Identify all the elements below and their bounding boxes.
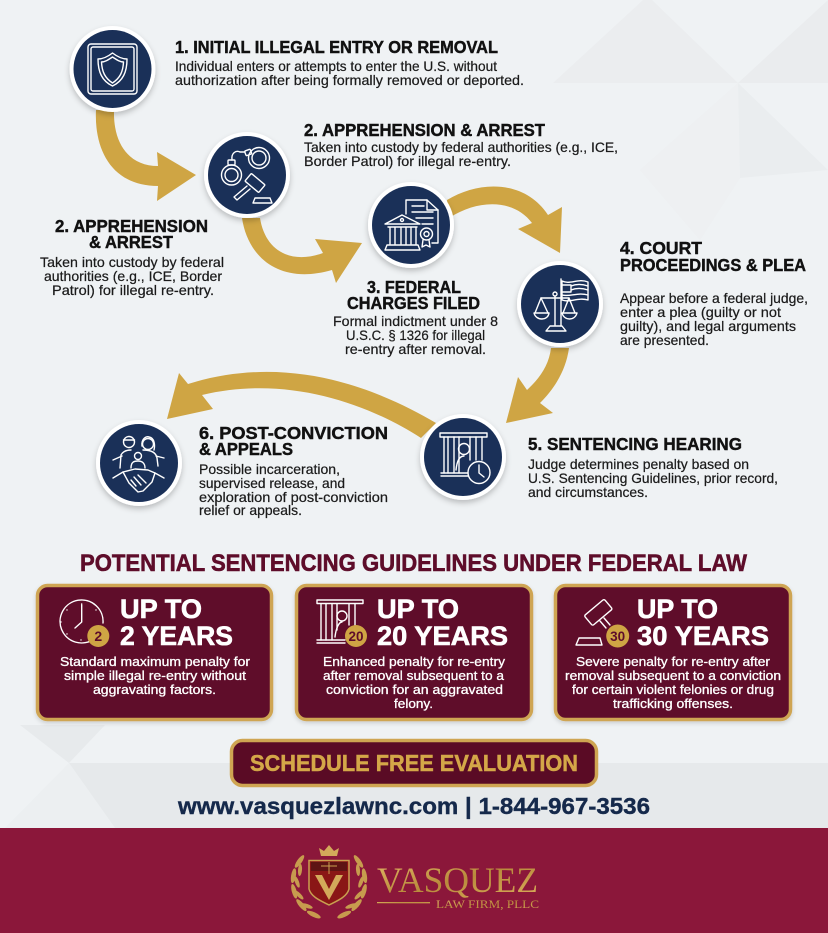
panel: up to 30 years: UP TO <box>637 594 718 624</box>
panel: up to 20 years: 20 YEARS <box>377 621 508 651</box>
panel: up to 2 years: aggravating factors. <box>93 682 216 697</box>
step 5 text: Judge determines penalty based on <box>528 456 749 472</box>
icon: courthouse and document <box>368 182 454 268</box>
logo: laurel, shield and crown <box>290 845 368 920</box>
icon: prison bars with 20 badge <box>317 600 367 647</box>
step 3 text: 3. FEDERAL <box>367 277 461 297</box>
panel: up to 30 years: 30 YEARS <box>637 621 769 651</box>
icon: gavel with 30 badge: 30 <box>610 629 625 644</box>
step 6 text: & APPEALS <box>199 439 293 459</box>
icon: clock with 2 badge: 2 <box>94 628 102 644</box>
contact line: www.vasquezlawnc.com | 1-844-967-3536 <box>177 793 650 819</box>
panel: up to 30 years: Severe penalty for re-entry after <box>576 654 771 669</box>
step 6 text: relief or appeals. <box>199 502 302 518</box>
button: schedule free evaluation: SCHEDULE FREE EVALUATION <box>250 750 578 776</box>
button: schedule free evaluation <box>232 740 596 786</box>
panel: up to 2 years: UP TO <box>120 594 202 624</box>
step 3 text: re-entry after removal. <box>345 341 486 357</box>
step 3 text <box>333 277 498 357</box>
icon: shield in border frame <box>70 26 156 112</box>
step 1 text: authorization after being formally removed or deported. <box>175 72 524 88</box>
step 2 text right: Border Patrol) for illegal re-entry. <box>304 153 511 169</box>
step 2 text left: & ARREST <box>89 232 173 252</box>
step 2 text right: Taken into custody by federal authorities (e.g., ICE, <box>304 139 618 155</box>
logo wordmark: VASQUEZ <box>377 860 538 900</box>
arrow: step 1 to step 2 <box>96 110 196 201</box>
step 1 text <box>175 37 524 88</box>
step 6 text: exploration of post-conviction <box>199 489 388 505</box>
step 5 text: 5. SENTENCING HEARING <box>528 434 742 454</box>
panel: up to 20 years <box>296 586 532 720</box>
step 2 text left <box>40 216 224 298</box>
icon: handcuffs and gavel <box>204 132 290 218</box>
section heading: POTENTIAL SENTENCING GUIDELINES UNDER FEDERAL LAW <box>80 550 747 577</box>
icon: gavel with 30 badge <box>576 599 629 648</box>
step 2 text left: Patrol) for illegal re-entry. <box>52 282 214 298</box>
panel: up to 20 years: after removal subsequent to a <box>323 668 505 683</box>
step 6 text <box>199 423 388 518</box>
step 4 text: Appear before a federal judge, <box>620 290 808 306</box>
step 3 text: CHARGES FILED <box>347 293 480 313</box>
panel: up to 20 years: conviction for an aggravated <box>326 682 503 697</box>
step 3 text: U.S.C. § 1326 for illegal <box>346 327 485 343</box>
panel: up to 2 years: simple illegal re-entry without <box>64 668 246 683</box>
icon: prison bars and clock <box>420 414 506 500</box>
step 4 text: 4. COURT <box>620 238 702 258</box>
icon: clock with 2 badge <box>60 600 109 647</box>
step 2 text left: authorities (e.g., ICE, Border <box>44 268 222 284</box>
logo wordmark: LAW FIRM, PLLC <box>436 899 539 911</box>
panel: up to 20 years: felony. <box>394 696 433 711</box>
panel: up to 30 years <box>556 586 790 720</box>
panel: up to 30 years: removal subsequent to a conviction <box>565 668 781 683</box>
step 1 text: Individual enters or attempts to enter the U.S. without <box>175 58 497 74</box>
panel: up to 30 years: trafficking offenses. <box>613 696 733 711</box>
step 2 text left: Taken into custody by federal <box>40 254 224 270</box>
arrow: step 4 to step 5 <box>506 348 569 423</box>
panel: up to 30 years: for certain violent felonies or drug <box>572 682 774 697</box>
icon: prison bars with 20 badge: 20 <box>348 629 364 644</box>
step 5 text <box>528 434 778 500</box>
step 4 text: PROCEEDINGS & PLEA <box>620 255 806 275</box>
step 4 text: guilty), and legal arguments <box>620 318 796 334</box>
step 1 text: 1. INITIAL ILLEGAL ENTRY OR REMOVAL <box>175 37 498 57</box>
arrow: step 3 to step 4 <box>447 186 562 253</box>
panel: up to 2 years: Standard maximum penalty for <box>60 654 251 669</box>
panel: up to 20 years: UP TO <box>377 594 459 624</box>
step 4 text: enter a plea (guilty or not <box>620 304 781 320</box>
panel: up to 2 years: 2 YEARS <box>120 621 233 651</box>
arrow: step 5 to step 6 <box>167 372 436 438</box>
step 6 text: Possible incarceration, <box>199 461 340 477</box>
panel: up to 2 years <box>38 586 272 720</box>
icon: family with handshake <box>96 420 182 506</box>
step 2 text right <box>304 120 618 169</box>
step 3 text: Formal indictment under 8 <box>333 313 498 329</box>
footer band <box>0 828 828 933</box>
step 2 text right: 2. APPREHENSION & ARREST <box>304 120 545 140</box>
panel: up to 20 years: Enhanced penalty for re-entry <box>323 654 506 669</box>
step 4 text: are presented. <box>620 332 709 348</box>
step 6 text: 6. POST-CONVICTION <box>199 423 388 443</box>
arrow: step 2 to step 3 <box>242 218 362 283</box>
step 6 text: supervised release, and <box>199 475 345 491</box>
step 4 text <box>620 238 808 348</box>
step 5 text: U.S. Sentencing Guidelines, prior record, <box>528 470 778 486</box>
icon: scales of justice and flag <box>517 261 603 347</box>
step 5 text: and circumstances. <box>528 484 648 500</box>
step 2 text left: 2. APPREHENSION <box>55 216 208 236</box>
